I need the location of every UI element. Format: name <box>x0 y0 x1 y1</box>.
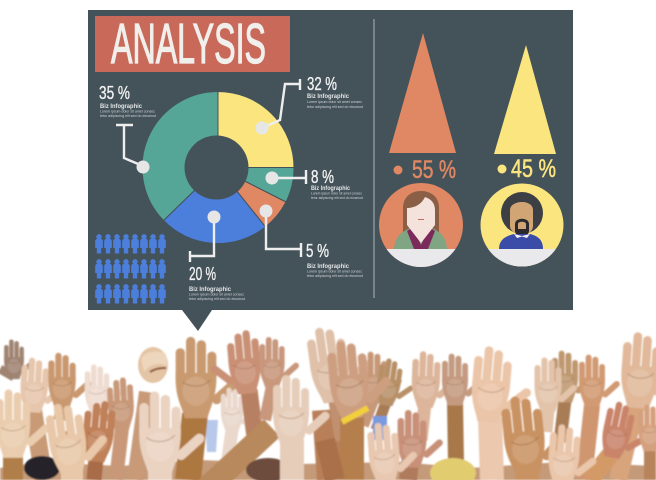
callout: 5 percent <box>260 204 363 278</box>
hair: dark patch left <box>24 456 60 480</box>
callout: 20 percent: Lorem ipsum dolor sit amet consec <box>189 292 244 296</box>
segment: 8 percent teal <box>218 168 294 202</box>
hand: pale back centre <box>221 388 257 458</box>
callout: 20 percent <box>189 210 245 301</box>
segment: 35 percent teal <box>142 91 218 220</box>
hand: dark back right <box>552 351 594 442</box>
shirt: blue sleeve <box>373 416 387 440</box>
callout: 8 percent: Lorem ipsum dolor sit amet consec <box>311 192 362 196</box>
gender comparison: female share <box>379 33 463 269</box>
callout: 32 percent: Lorem ipsum dolor sit amet consec <box>307 100 362 104</box>
hand: front brown <box>62 398 117 480</box>
value: 55 percent <box>394 156 456 184</box>
photo: crowd of raised hands <box>0 321 656 480</box>
segment: 5 percent orange <box>218 168 286 227</box>
callout: 8 percent: tetur adipiscing elit sed do eiusmod <box>311 196 363 200</box>
callout: 5 percent: Biz Infographic <box>307 264 350 270</box>
hand: fist with arm <box>135 347 168 480</box>
hand: far right edge <box>638 404 656 480</box>
hand: reddish back <box>259 337 300 420</box>
callout: 35 percent: Lorem ipsum dolor sit amet consec <box>100 110 155 114</box>
callout: 8 percent: Biz Infographic <box>311 186 351 192</box>
hand: tall pink <box>206 329 263 445</box>
hand: folded tan <box>500 391 573 480</box>
value: 45 percent: 45 % <box>511 155 556 183</box>
triangle: 55 percent <box>389 33 456 153</box>
gender comparison: male share <box>480 45 564 269</box>
hand: pale back <box>85 364 124 420</box>
donut chart <box>142 91 294 244</box>
callout: 32 percent <box>256 74 363 134</box>
hand: dark back left <box>0 340 36 379</box>
hand: brown arm back <box>442 354 484 462</box>
hand: right of centre <box>305 321 376 440</box>
hand: tall centre <box>176 337 242 480</box>
hand: dark with watch <box>374 357 418 430</box>
icon: man portrait <box>480 183 564 269</box>
segment: 32 percent yellow <box>218 92 294 168</box>
hand: reddish right <box>590 400 654 480</box>
hand: large pale open <box>469 345 537 480</box>
callout: 5 percent: Lorem ipsum dolor sit amet consec <box>307 270 362 274</box>
hand: front small pale <box>367 420 420 480</box>
hand: behind right pile <box>361 352 403 425</box>
arm: diagonal hairy <box>205 428 272 480</box>
callout: 8 percent <box>266 167 363 200</box>
callout: 20 percent: 20 % <box>189 264 216 284</box>
callout: 35 percent: 35 % <box>99 83 130 103</box>
panel: presentation board <box>88 10 573 331</box>
value: 45 percent <box>498 155 556 183</box>
arm: dark forearm <box>325 410 330 480</box>
hand: front centre pale <box>273 375 331 480</box>
callout: 32 percent: tetur adipiscing elit sed do eiusmod <box>307 105 363 109</box>
arm: dark left of centre <box>325 440 335 480</box>
hand: front pale <box>44 398 113 480</box>
hand: bottom pale right <box>547 424 600 480</box>
crowd base: lower bodies and arms <box>0 460 656 480</box>
callout: 20 percent: Biz Infographic <box>189 287 232 293</box>
hand: front sleeve arm <box>398 410 444 480</box>
callout: 32 percent: 32 % <box>307 74 337 94</box>
hand: top right <box>618 331 656 480</box>
callout: 32 percent: Biz Infographic <box>307 94 350 100</box>
hand: pale over dark <box>411 351 458 440</box>
bracelet: yellow <box>342 408 368 422</box>
triangle: 45 percent <box>494 45 556 154</box>
callout: 35 percent: tetur adipiscing elit sed do eiusmod <box>100 114 156 118</box>
title: Analysis banner <box>95 12 290 76</box>
hand: front pale palm <box>139 392 206 480</box>
title: Analysis banner: ANALYSIS <box>111 12 266 76</box>
callout: 5 percent: 5 % <box>306 241 329 261</box>
icon: woman portrait <box>379 183 463 269</box>
hand: tan right <box>579 355 621 480</box>
hair: blonde head <box>430 458 476 480</box>
hand: mid tan <box>90 377 135 480</box>
callout: 5 percent: tetur adipiscing elit sed do eiusmod <box>307 274 363 278</box>
callout: 35 percent <box>99 83 156 174</box>
shirt: pale blue sleeve <box>205 420 218 452</box>
hand: tan left <box>48 353 93 420</box>
value: 55 percent: 55 % <box>412 156 456 184</box>
callout: 35 percent: Biz Infographic <box>100 104 143 110</box>
segment: 20 percent blue <box>164 168 266 244</box>
hair: head behind arm <box>246 458 290 480</box>
hand: pale left <box>19 357 66 480</box>
callout: 20 percent: tetur adipiscing elit sed do eiusmod <box>189 297 245 301</box>
hand: big foreground pile <box>326 337 396 480</box>
hand: front left pale <box>0 390 51 480</box>
pictogram: rows of blue people <box>95 234 166 304</box>
donut hole <box>184 136 248 200</box>
hand: back right pale <box>534 358 578 432</box>
callout: 8 percent: 8 % <box>311 167 334 187</box>
